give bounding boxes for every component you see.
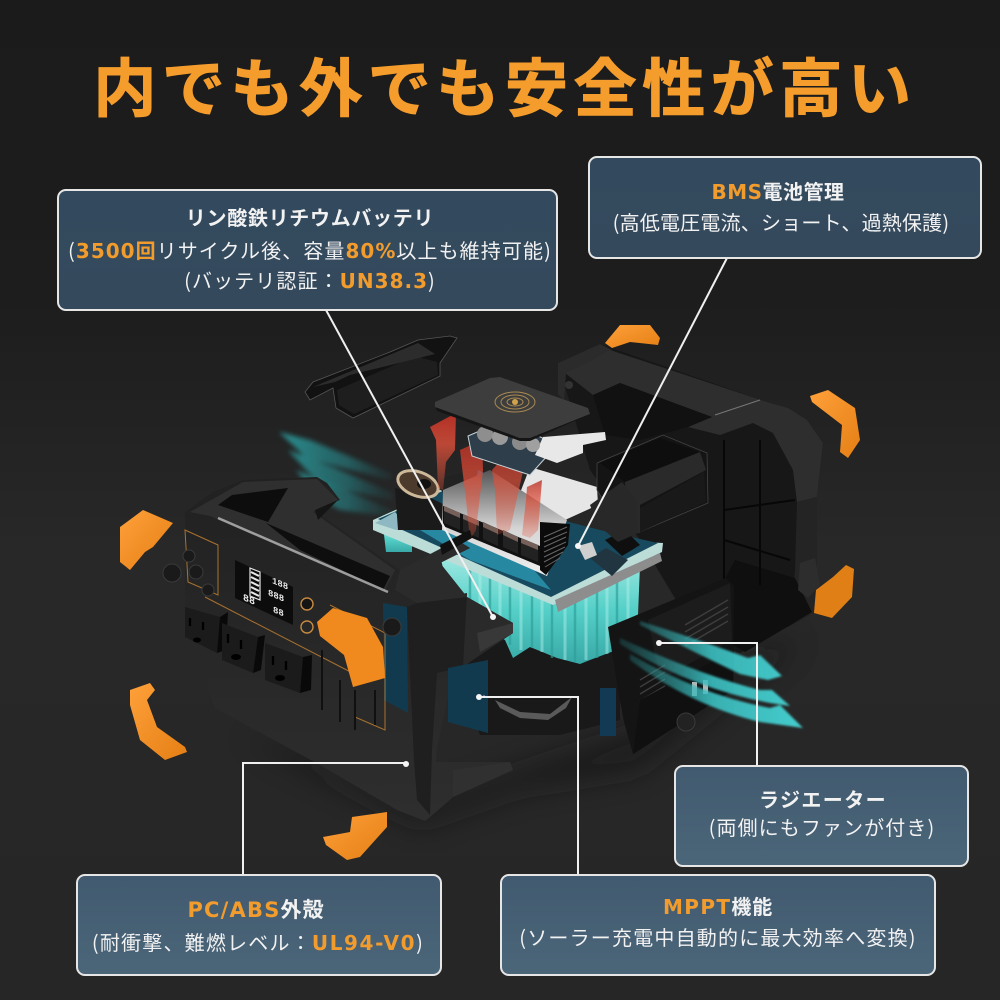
radiator heading: ラジエーター [759, 784, 887, 813]
BMS heading: BMS電池管理 [711, 176, 845, 205]
connector dots [403, 543, 662, 767]
panel traces [322, 650, 375, 730]
orange corner: right [810, 390, 860, 458]
orange corner: top right [605, 325, 660, 348]
capacitor coil [394, 466, 490, 530]
fan side panel [600, 578, 734, 754]
dark base under cells [450, 630, 620, 735]
panel: radiator [675, 766, 968, 866]
LCD display: 888 [268, 587, 285, 605]
red heat arrows [430, 413, 542, 540]
MPPT heading: MPPT機能 [663, 891, 773, 920]
orange corner: front [317, 608, 385, 687]
right airflow arrows [620, 621, 803, 728]
case description: (耐衝撃、難燃レベル：UL94-V0) [92, 927, 424, 956]
left airflow arrows [279, 432, 395, 516]
LCD display: 88 [243, 592, 255, 609]
line: BMS [578, 258, 727, 546]
case heading: PC/ABS外殻 [187, 894, 325, 924]
battery cells [383, 526, 640, 664]
USB ports [301, 598, 313, 633]
line: battery [326, 310, 493, 617]
LCD display [235, 560, 293, 625]
title: 内でも外でも安全性が高い [93, 39, 917, 130]
knobs [163, 550, 401, 636]
product illustration [120, 325, 860, 860]
wireless charging pad [435, 377, 590, 441]
connector lines [243, 258, 757, 875]
ground shadows [240, 640, 800, 825]
panel: BMS [589, 157, 981, 258]
right handle [590, 435, 708, 542]
circuit plate [373, 490, 663, 612]
panel: MPPT [501, 875, 935, 975]
LCD display: 188 [272, 575, 289, 593]
panel: battery [58, 190, 557, 310]
coin stack and white bracket [468, 420, 606, 475]
radiator description: (両側にもファンが付き) [709, 812, 935, 841]
gear detail [495, 697, 572, 720]
back frame [558, 344, 823, 653]
BMS description: (高低電圧電流、ショート、過熱保護) [613, 207, 949, 236]
battery cycle text: (3500回リサイクル後、容量80%以上も維持可能) [68, 235, 552, 264]
orange corner: left [130, 683, 187, 760]
heat sink and mosfet block [442, 467, 598, 576]
LCD display: 88 [273, 604, 284, 620]
orange corner: lower right [814, 565, 854, 618]
battery heading: リン酸鉄リチウムバッテリ [186, 202, 434, 231]
MPPT description: (ソーラー充電中自動的に最大効率へ変換) [519, 922, 917, 951]
floating handle [305, 336, 457, 418]
line: MPPT [479, 697, 578, 875]
orange corner: bottom [323, 812, 387, 860]
panel: case [77, 875, 441, 975]
line: case [243, 763, 406, 875]
AC outlets [185, 607, 312, 693]
line: radiator [659, 643, 757, 766]
front panel trim [185, 530, 385, 730]
orange corner: upper left [120, 510, 173, 570]
battery certification text: (バッテリ認証：UN38.3) [184, 265, 436, 294]
control unit body [185, 477, 513, 821]
